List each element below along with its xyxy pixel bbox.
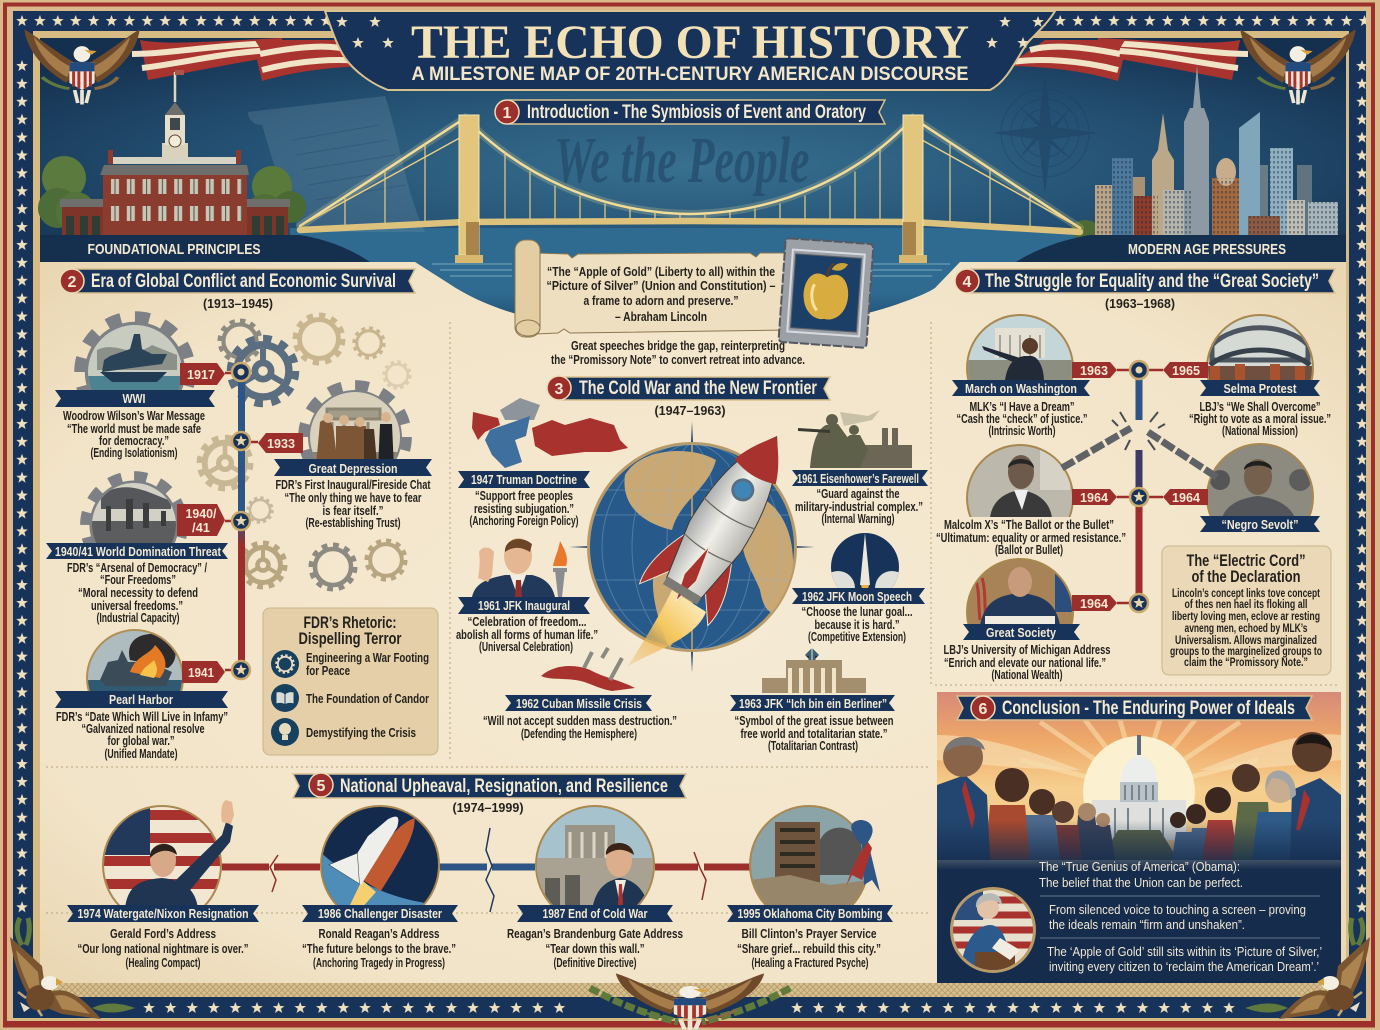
event: World Domination Threat: FDR’s “Arsenal of Democracy” /	[67, 561, 207, 575]
promissory note text: the “Promissory Note” to convert retreat into advance.	[551, 353, 805, 367]
broken chain timeline: 1964	[1080, 596, 1109, 611]
event: Ich bin ein Berliner: free world and totalitarian state.”	[740, 727, 888, 741]
conclusion artwork	[937, 692, 1341, 983]
tag 1940/41	[177, 504, 232, 536]
panel: Electric Cord: avneng men, echoed by MLK’s	[1184, 623, 1308, 635]
icon: bottom center eagle with laurels	[590, 973, 790, 1030]
event: Selma Protest: (National Mission)	[1222, 424, 1298, 438]
event: WWI: Woodrow Wilson’s War Message	[63, 409, 205, 423]
event: WWI: “The world must be made safe	[67, 422, 201, 436]
event: Ballot or the Bullet: “Ultimatum: equality or armed resistance.”	[936, 531, 1126, 545]
tag 1941	[182, 661, 232, 683]
foundational principles caption band: FOUNDATIONAL PRINCIPLES	[88, 241, 260, 258]
tag 1917	[180, 363, 232, 385]
event: JFK Moon Speech: 1962 JFK Moon Speech	[802, 590, 912, 604]
section 5 heading	[293, 773, 686, 798]
section 5 heading: 5	[317, 778, 326, 795]
broken chain timeline	[1062, 361, 1218, 612]
JFK with torch	[472, 538, 567, 597]
section 2 heading	[60, 269, 415, 293]
event: Great Society: (National Wealth)	[992, 668, 1062, 682]
event: JFK Moon Speech: “Choose the lunar goal...	[802, 605, 912, 619]
section 5 heading: National Upheaval, Resignation, and Resilience	[340, 776, 668, 797]
panel: FDR's rhetoric: Dispelling Terror	[298, 630, 402, 648]
icon: bottom-left eagle	[10, 918, 135, 1019]
event: Eisenhower's Farewell: military-industrial complex.”	[795, 500, 923, 514]
conclusion statement 2	[1049, 903, 1306, 932]
event: Cuban Missile Crisis: 1962 Cuban Missile Crisis	[516, 697, 642, 711]
event: Ich bin ein Berliner: (Totalitarian Contrast)	[768, 739, 858, 753]
tag 1933: 1933	[267, 436, 295, 451]
tag 1940/41: /41	[192, 520, 210, 535]
event: JFK Moon Speech: (Competitive Extension)	[808, 630, 906, 644]
panel: FDR's rhetoric: The Foundation of Candor	[306, 692, 429, 706]
event: Cuban Missile Crisis	[483, 648, 677, 741]
event: Great Depression: “The only thing we have to fear	[284, 491, 422, 505]
event: Great Depression: FDR’s First Inaugural/Fireside Chat	[276, 478, 431, 492]
crowd right	[1170, 732, 1341, 860]
tag 1941: 1941	[188, 665, 214, 680]
panel: Electric Cord	[1162, 546, 1331, 675]
event: Great Society: Great Society	[986, 626, 1056, 640]
event: Selma Protest: “Right to vote as a moral issue.”	[1189, 412, 1331, 426]
subtitle: A MILESTONE MAP OF 20TH-CENTURY AMERICAN DISCOURSE	[412, 64, 968, 85]
event: World Domination Threat	[46, 477, 228, 625]
event: Ich bin ein Berliner: “Symbol of the great issue between	[734, 714, 894, 728]
Lincoln quote scroll: – Abraham Lincoln	[615, 310, 707, 324]
event: Challenger disaster	[302, 793, 458, 970]
event: JFK Inaugural: (Universal Celebration)	[479, 640, 573, 654]
bottom ornamental border	[5, 983, 1373, 1026]
event: JFK Inaugural: “Celebration of freedom...	[468, 615, 586, 629]
icon: top-right eagle	[1240, 30, 1356, 104]
main title: THE ECHO OF HISTORY	[411, 16, 969, 69]
event: Pearl Harbor: (Unified Mandate)	[104, 747, 178, 761]
broken chain timeline: 1964	[1172, 490, 1201, 505]
Lincoln quote scroll: “The “Apple of Gold” (Liberty to all) within the	[547, 265, 775, 279]
section 3 heading	[547, 376, 830, 400]
event: Truman Doctrine: 1947 Truman Doctrine	[471, 473, 577, 487]
conclusion statement 2: the ideals remain “firm and unshaken”.	[1049, 918, 1245, 932]
event: March on Washington: “Cash the “check” of justice.”	[956, 412, 1088, 426]
event: Nixon resignation: Gerald Ford’s Address	[110, 927, 216, 941]
hero sky	[40, 38, 1346, 270]
broken chain	[1062, 428, 1218, 478]
modern age pressures caption band: MODERN AGE PRESSURES	[1128, 241, 1286, 258]
voter portrait medallion	[950, 887, 1036, 975]
event: Eisenhower's Farewell: (Internal Warning)	[822, 512, 894, 526]
event: Great Depression: (Re-establishing Trust)	[306, 516, 400, 530]
event: Oklahoma City bombing: “Share grief... rebuild this city.”	[737, 942, 881, 956]
event: World Domination Threat: “Four Freedoms”	[100, 573, 176, 587]
icon: apple of gold in silver frame	[778, 238, 874, 348]
faded We the People script: We the People	[554, 124, 810, 197]
event: Selma Protest	[1189, 314, 1331, 438]
event: End of Cold War: (Definitive Directive)	[554, 956, 636, 970]
event: March on Washington: (Intrinsic Worth)	[988, 424, 1056, 438]
event: JFK Inaugural	[456, 538, 598, 654]
event: World Domination Threat: universal freedoms.”	[91, 599, 183, 613]
conclusion statement 3: inviting every citizen to ‘reclaim the American Dream’.’	[1049, 960, 1319, 974]
event: WWI: for democracy.”	[99, 434, 169, 448]
event: JFK Moon Speech: because it is hard.”	[814, 618, 900, 632]
panel: Electric Cord: The “Electric Cord”	[1186, 552, 1306, 570]
panel: FDR's rhetoric	[263, 608, 438, 755]
section 3 dates: (1947–1963)	[654, 404, 726, 418]
event: Challenger disaster: Ronald Reagan’s Address	[318, 927, 440, 941]
modern skyline	[1071, 65, 1338, 240]
event: WWI: WWI	[122, 392, 146, 406]
section 6 heading: Conclusion - The Enduring Power of Ideals	[1002, 698, 1295, 719]
rocket launching across the globe	[627, 415, 812, 667]
event: Great Depression: Great Depression	[308, 462, 398, 476]
event: JFK Moon Speech	[792, 533, 925, 644]
event: WWI: (Ending Isolationism)	[90, 446, 178, 460]
event: Challenger disaster: (Anchoring Tragedy in Progress)	[313, 956, 445, 970]
event: March on Washington: MLK’s “I Have a Dream”	[970, 400, 1074, 414]
section 1 heading: Introduction - The Symbiosis of Event and Oratory	[527, 102, 866, 123]
section 1 heading	[495, 100, 885, 124]
broken chain timeline: 1965	[1172, 363, 1200, 378]
Capitol building	[1092, 735, 1186, 860]
soldiers and factory	[798, 410, 912, 468]
connectors and year tags	[1117, 370, 1163, 603]
event: End of Cold War: 1987 End of Cold War	[542, 907, 648, 921]
section 2 dates: (1913–1945)	[203, 297, 273, 311]
modern age pressures caption band	[1016, 235, 1346, 262]
panel: FDR's rhetoric: Engineering a War Footing	[306, 651, 429, 665]
tag 1933	[250, 433, 303, 453]
event: Challenger disaster: 1986 Challenger Disaster	[318, 907, 442, 921]
event: Truman Doctrine: “Support free peoples	[475, 489, 573, 503]
event: WWI	[55, 318, 215, 460]
icon: open book	[271, 684, 299, 712]
Independence Hall	[38, 70, 306, 235]
event: Great Society	[944, 558, 1111, 682]
suspension bridge	[300, 115, 1080, 263]
icon: bottom-right eagle	[1245, 918, 1370, 1019]
conclusion statement 1: The belief that the Union can be perfect.	[1039, 876, 1243, 890]
event: World Domination Threat: “Moral necessity to defend	[78, 586, 198, 600]
conclusion statement 3: The ‘Apple of Gold’ still sits within its ‘Picture of Silver,’	[1047, 945, 1322, 959]
Cuba map with missiles	[541, 648, 635, 691]
Lincoln quote scroll: a frame to adorn and preserve.”	[584, 294, 738, 308]
panel: FDR's rhetoric: Demystifying the Crisis	[306, 726, 416, 740]
event: Great Depression: is fear itself.”	[322, 504, 384, 518]
decorative gears: section 2	[200, 316, 410, 589]
section dividers	[46, 322, 1340, 767]
event: World Domination Threat: 1940/41 World Domination Threat	[55, 545, 222, 559]
section 4 heading: 4	[963, 274, 972, 291]
panel: FDR's rhetoric: for Peace	[306, 664, 350, 678]
event: Pearl Harbor: FDR’s “Date Which Will Live in Infamy”	[56, 710, 228, 724]
section 5 dates: (1974–1999)	[452, 801, 524, 815]
conclusion statement 2: From silenced voice to touching a screen – proving	[1049, 903, 1306, 917]
section 1 heading: 1	[503, 105, 512, 122]
cream content panel	[40, 262, 1346, 986]
event: Negro Revolt portrait: “Negro Sevolt”	[1222, 518, 1298, 532]
event: Pearl Harbor: Pearl Harbor	[109, 693, 173, 707]
event: Great Depression	[274, 387, 432, 530]
panel title: FDR’s Rhetoric:	[304, 614, 396, 632]
event: End of Cold War: “Tear down this wall.”	[546, 942, 644, 956]
panel: Electric Cord: groups to the marginelized groups to	[1170, 646, 1322, 658]
section 2 heading: Era of Global Conflict and Economic Survival	[91, 271, 396, 292]
Brandenburg Gate	[762, 652, 866, 693]
event: Truman Doctrine	[458, 398, 628, 528]
hero illustration: bridge between eras	[38, 38, 1346, 349]
event: Truman Doctrine: resisting subjugation.”	[474, 502, 574, 516]
tag 1940/41: 1940/	[186, 506, 217, 521]
event: Eisenhower's Farewell: “Guard against the	[816, 487, 900, 501]
right flag	[1002, 38, 1248, 81]
section 6 heading: 6	[979, 701, 988, 718]
event: Great Society: “Enrich and elevate our national life.”	[944, 656, 1106, 670]
panel: Electric Cord: claim the “Promissory Note.”	[1184, 657, 1308, 669]
event: Ballot or the Bullet: Malcolm X’s “The Ballot or the Bullet”	[944, 518, 1114, 532]
panel: Electric Cord: Universalism. Allows marginalized	[1175, 635, 1317, 647]
event: Great Society: LBJ’s University of Michigan Address	[944, 643, 1111, 657]
event: Nixon resignation: (Healing Compact)	[126, 956, 200, 970]
section 6: conclusion panel	[937, 692, 1341, 983]
nodes	[1130, 361, 1148, 612]
event: March on Washington	[952, 314, 1090, 438]
promissory note text	[551, 339, 805, 367]
panel: Electric Cord: of thes nen hael its floking all	[1184, 599, 1308, 611]
event: Nixon resignation: 1974 Watergate/Nixon Resignation	[78, 907, 248, 921]
promissory note text: Great speeches bridge the gap, reinterpreting	[571, 339, 785, 353]
event: JFK Inaugural: 1961 JFK Inaugural	[478, 599, 570, 613]
section 3 heading: The Cold War and the New Frontier	[579, 378, 817, 399]
event: World Domination Threat: (Industrial Capacity)	[96, 611, 180, 625]
fractured timeline	[46, 828, 928, 913]
panel: Electric Cord: of the Declaration	[1192, 568, 1300, 586]
icon: light bulb	[271, 718, 299, 746]
section 6 heading	[957, 696, 1312, 720]
title banner	[325, 11, 1055, 90]
conclusion statement 3	[1047, 945, 1322, 974]
event: Oklahoma City bombing: (Healing a Fractured Psyche)	[752, 956, 868, 970]
event: Nixon resignation: “Our long national nightmare is over.”	[78, 942, 248, 956]
event: Ich bin ein Berliner: 1963 JFK “Ich bin ein Berliner”	[739, 697, 887, 711]
section 3 heading: 3	[555, 381, 564, 398]
tag 1917: 1917	[187, 367, 215, 382]
event: Oklahoma City bombing: 1995 Oklahoma City Bombing	[738, 907, 882, 921]
panel: Electric Cord: Lincoln’s concept links tove concept	[1172, 588, 1320, 600]
icon: top-left eagle	[24, 30, 140, 104]
event: End of Cold War	[507, 805, 683, 970]
timeline nodes	[232, 363, 250, 679]
event: JFK Inaugural: abolish all forms of human life.”	[456, 628, 598, 642]
event: Selma Protest: LBJ’s “We Shall Overcome”	[1200, 400, 1320, 414]
event: Ballot or the Bullet	[936, 444, 1126, 557]
broken chain timeline: 1964	[1080, 490, 1109, 505]
event: Nixon resignation	[67, 800, 259, 970]
section 4 dates: (1963–1968)	[1105, 297, 1175, 311]
event: Eisenhower's Farewell: 1961 Eisenhower’s Farewell	[797, 472, 919, 486]
event: Cuban Missile Crisis: (Defending the Hemisphere)	[521, 727, 637, 741]
event: March on Washington: March on Washington	[965, 382, 1077, 396]
panel: Electric Cord: liberty loving men, eclove ar resting	[1172, 611, 1320, 623]
Lincoln quote scroll	[515, 240, 790, 337]
event: Negro Revolt portrait	[1200, 443, 1320, 532]
section 2 timeline	[177, 363, 303, 683]
central globe with compass points	[569, 421, 815, 673]
moon rocket	[831, 533, 899, 588]
Lincoln quote scroll: “Picture of Silver” (Union and Constitution) –	[546, 279, 776, 293]
event: Challenger disaster: “The future belongs to the brave.”	[302, 942, 456, 956]
event: Selma Protest: Selma Protest	[1224, 382, 1297, 396]
foundational principles caption band	[40, 235, 370, 262]
event: Cuban Missile Crisis: “Will not accept sudden mass destruction.”	[483, 714, 677, 728]
event: Ballot or the Bullet: (Ballot or Bullet)	[995, 543, 1063, 557]
event: Pearl Harbor: “Galvanized national resolve	[82, 722, 205, 736]
event: Pearl Harbor: for global war.”	[108, 734, 174, 748]
event: Oklahoma City bombing	[727, 805, 893, 970]
section 2 heading: 2	[68, 274, 77, 291]
conclusion statement 1	[1039, 860, 1243, 890]
faded parchment document	[248, 96, 425, 232]
banner stars	[336, 16, 1044, 48]
event: Oklahoma City bombing: Bill Clinton’s Prayer Service	[742, 927, 877, 941]
event: Eisenhower's Farewell	[792, 410, 928, 526]
map of Greece and Turkey	[472, 398, 628, 468]
broken chain timeline: 1963	[1080, 363, 1108, 378]
icon: gear	[271, 650, 299, 678]
river water	[290, 228, 1095, 349]
event: Truman Doctrine: (Anchoring Foreign Policy)	[470, 514, 578, 528]
event: Ich bin ein Berliner	[730, 652, 895, 753]
faded compass rose	[995, 75, 1095, 191]
conclusion statement 1: The “True Genius of America” (Obama):	[1039, 860, 1240, 874]
left flag	[132, 38, 378, 81]
event: End of Cold War: Reagan’s Brandenburg Gate Address	[507, 927, 683, 941]
event: Pearl Harbor	[55, 629, 228, 761]
crowd left	[937, 737, 1115, 860]
